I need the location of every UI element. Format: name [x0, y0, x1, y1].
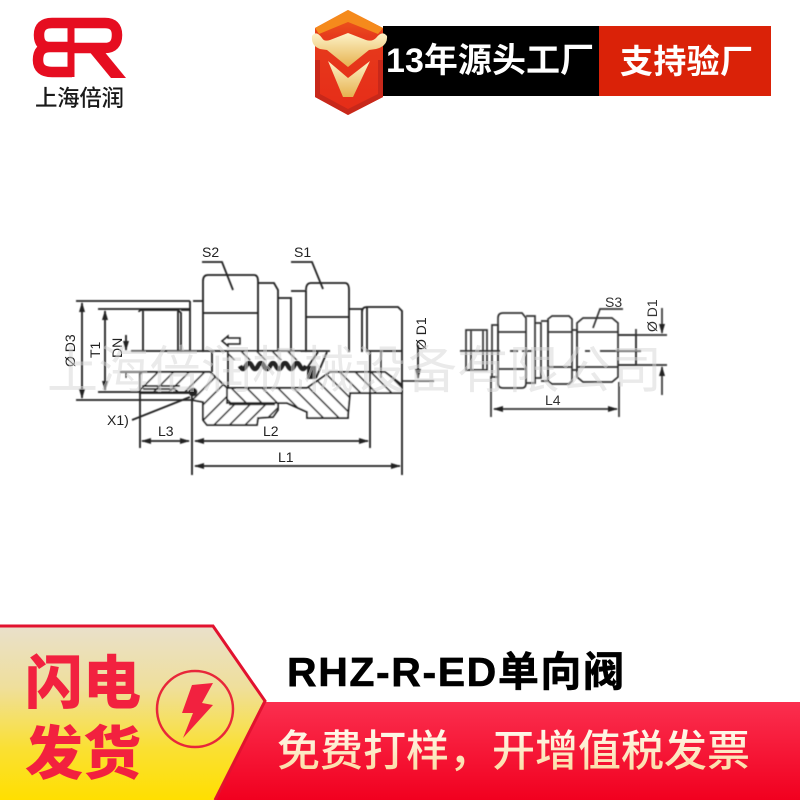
red band: [214, 702, 800, 800]
watermark: 上海倍润机械设备有限公司: [47, 342, 662, 399]
labels: side view: S3: [605, 294, 622, 310]
icon: direction arrow: [222, 336, 240, 346]
labels: main section view: Ø D3: [62, 334, 78, 367]
闪电: 闪电: [25, 651, 141, 716]
centre lines: [131, 350, 330, 352]
labels: side view: Ø D1: [644, 299, 660, 332]
flash delivery badge: [0, 626, 265, 800]
labels: main section view: X1): [107, 412, 129, 428]
labels: main section view: L2: [263, 423, 279, 439]
icon: shield badge: [312, 10, 387, 115]
labels: main section view: T1: [87, 341, 103, 358]
labels: side view: [545, 294, 660, 408]
technical drawing: side view: [460, 308, 667, 417]
leaders: [202, 262, 323, 290]
labels: side view: L4: [545, 392, 561, 408]
lower hatched section: [140, 372, 278, 425]
发货: 发货: [25, 722, 141, 787]
labels: main section view: Ø D1: [413, 317, 429, 350]
logo: BR 上海倍润: 上海倍润: [35, 86, 124, 111]
labels: main section view: DN: [109, 338, 125, 358]
labels: main section view: L1: [278, 449, 294, 465]
labels: main section view: S2: [202, 244, 219, 260]
dimensions: left: [76, 301, 193, 400]
banner: 支持验厂: 支持验厂: [620, 43, 753, 80]
banner: 支持验厂: [599, 26, 771, 96]
upper half outline: [139, 275, 402, 352]
labels: main section view: S1: [294, 244, 311, 260]
icon: lightning: [157, 671, 233, 747]
technical drawing: main section view: [76, 262, 434, 475]
labels: main section view: L3: [158, 423, 174, 439]
logo: BR 上海倍润: [35, 18, 126, 111]
banner: 13年源头工厂: [383, 26, 599, 96]
labels: main section view: [62, 244, 429, 465]
banner: 13年源头工厂: 13年源头工厂: [386, 42, 594, 80]
title: RHZ-R-ED单向阀: [287, 649, 624, 695]
slogan: 免费打样，开增值税发票: [277, 728, 750, 776]
